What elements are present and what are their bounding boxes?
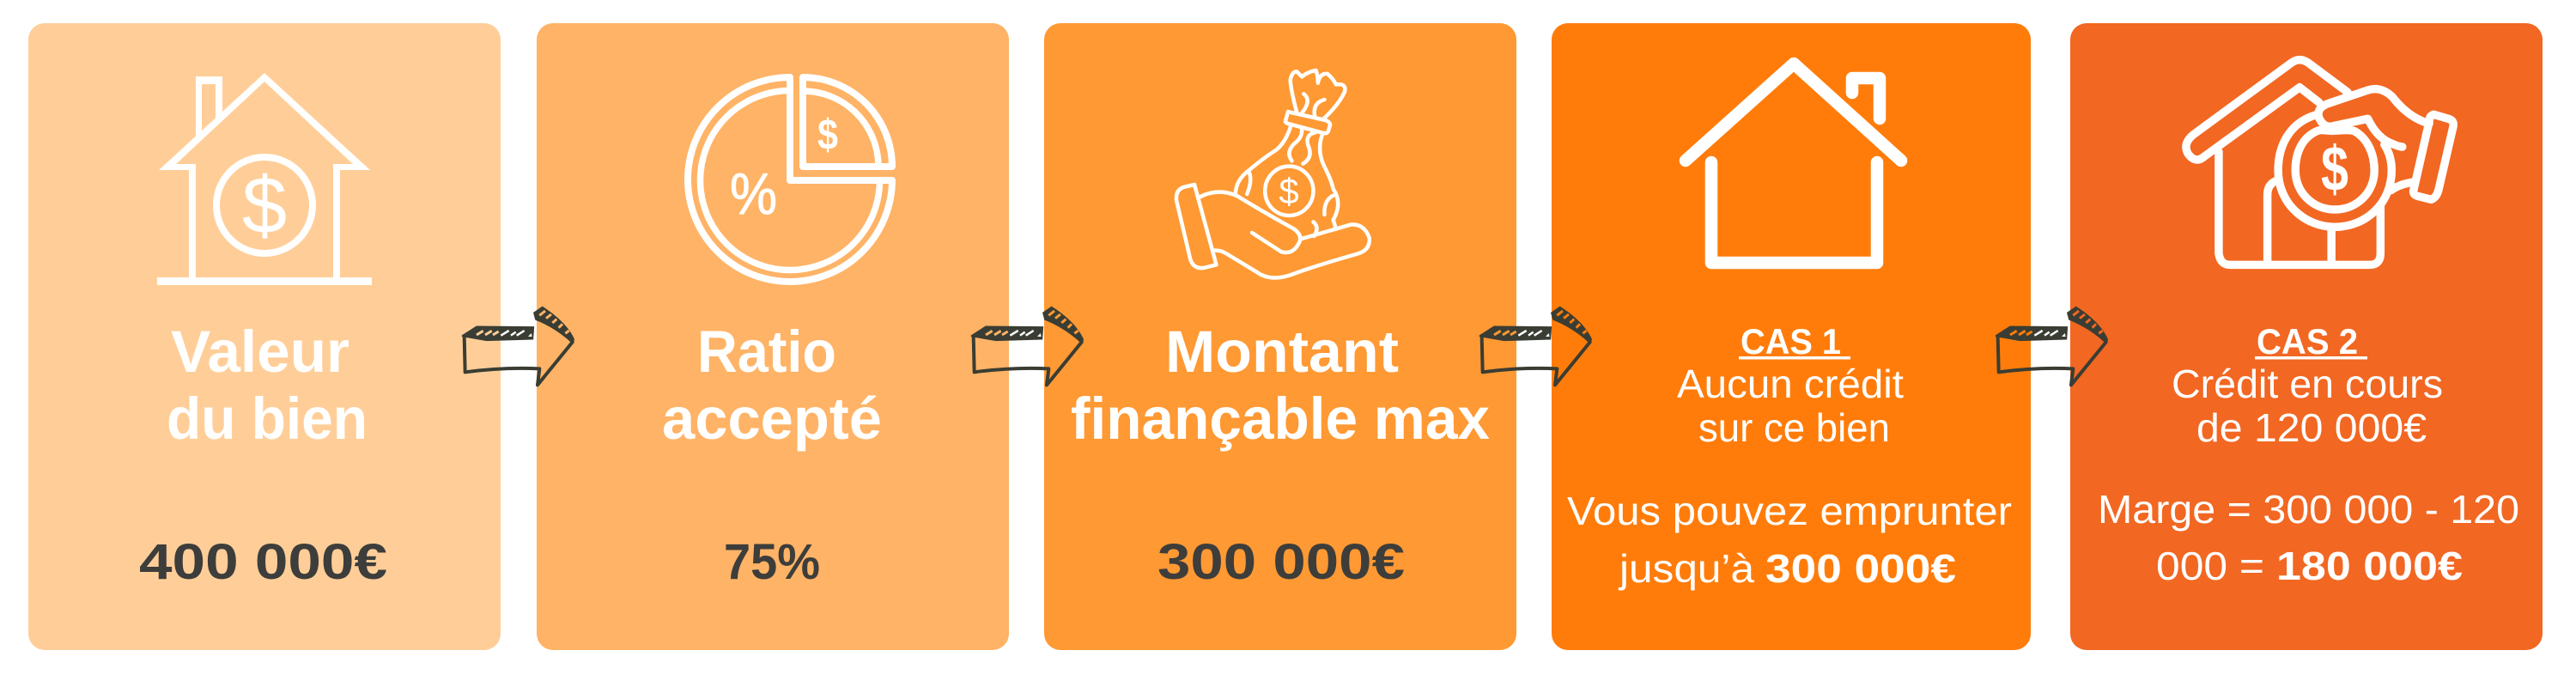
heading: valeur du bien: du bien [167,386,368,452]
panel: cas 1 [1552,23,2031,650]
heading: cas 2: CAS 2 [2257,321,2358,362]
text: crédit en cours de 120 000 euros [2172,362,2443,450]
heading: valeur du bien [167,319,368,452]
heading: ratio accepté: Ratio [697,319,836,385]
icon: house with dollar coin [157,73,372,285]
value: 75 percent: 75% [724,534,820,590]
text: vous pouvez emprunter jusqu'à 300 000 euros: Vous pouvez emprunter [1567,489,2012,533]
text: vous pouvez emprunter jusqu'à 300 000 euros: jusqu’à [1618,546,1754,591]
icon: pie chart with percent and dollar [688,77,892,282]
arrow: valeur to ratio [462,307,574,385]
panel: cas 2 [2070,23,2543,650]
text: marge calculation: 000 = [2156,544,2264,588]
icon: pie chart with percent and dollar: $ [817,111,838,159]
text: marge calculation: Marge = 300 000 - 120 [2098,487,2519,532]
text: crédit en cours de 120 000 euros: de 120 000€ [2196,405,2427,450]
icon: simple house [1686,64,1901,263]
heading: montant finançable max: Montant [1165,319,1399,385]
text: aucun crédit sur ce bien: sur ce bien [1698,405,1890,450]
panel: ratio accepté [537,23,1009,650]
value: 400 000 euros: 400 000€ [139,534,387,590]
heading: valeur du bien: Valeur [171,319,349,385]
icon: house with dollar coin: $ [242,160,287,250]
heading: cas 1: CAS 1 [1741,321,1841,362]
value: 300 000 euros: 300 000€ [1157,534,1405,590]
text: aucun crédit sur ce bien: Aucun crédit [1677,362,1904,406]
heading: montant finançable max [1071,319,1490,452]
icon: pie chart with percent and dollar: % [730,161,777,227]
arrow: montant to cas 1 [1479,307,1592,385]
icon: hand placing coin on house [2186,60,2453,264]
text: marge calculation: 180 000€ [2276,544,2463,588]
text: crédit en cours de 120 000 euros: Crédit en cours [2172,362,2443,406]
icon: dollar on coin: $ [2321,133,2348,204]
icon: dollar on money bag: $ [1279,171,1299,211]
text: marge calculation [2098,487,2519,588]
heading: montant finançable max: finançable max [1071,386,1490,452]
text: vous pouvez emprunter jusqu'à 300 000 euros: 300 000€ [1765,546,1956,591]
panel: valeur du bien [28,23,501,650]
heading: ratio accepté [662,319,882,452]
text: vous pouvez emprunter jusqu'à 300 000 euros [1567,489,2012,591]
panel: montant finançable max [1044,23,1516,650]
arrow: cas 1 to cas 2 [1996,307,2108,385]
icon: hand holding money bag [1176,70,1370,277]
heading: ratio accepté: accepté [662,386,882,452]
arrow: ratio to montant [971,307,1084,385]
text: aucun crédit sur ce bien [1677,362,1904,450]
